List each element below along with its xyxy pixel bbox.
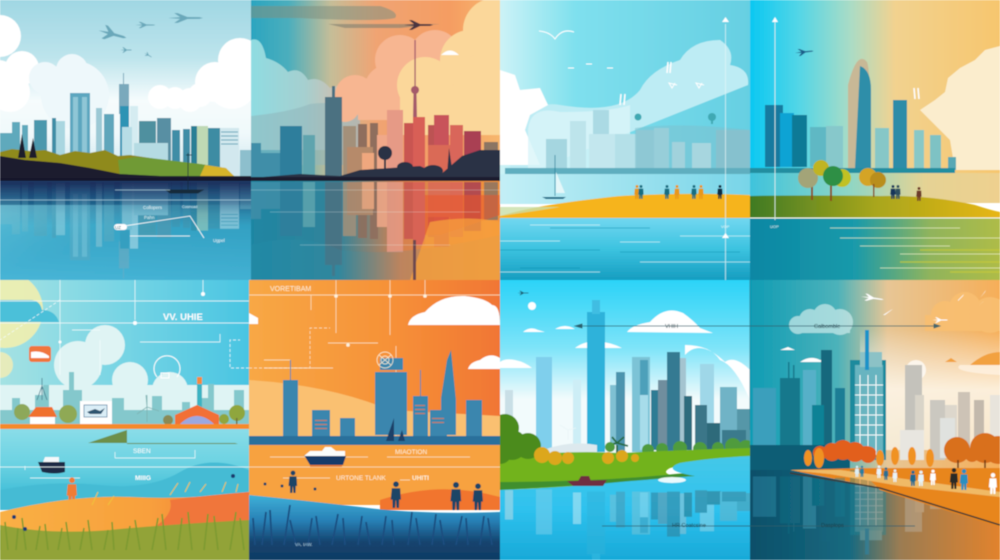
labels: Dasplops	[821, 523, 844, 529]
sand	[0, 492, 249, 560]
orange trees	[804, 433, 1000, 475]
labels: HR Coatcsine	[672, 523, 706, 529]
diagram lines	[124, 216, 204, 238]
boat	[304, 447, 346, 466]
diagram labels	[115, 205, 225, 243]
antenna icon	[377, 352, 393, 368]
reflection	[753, 470, 1000, 554]
shoreline highlight	[750, 217, 1000, 219]
left building and trees	[14, 378, 77, 424]
planes and birds	[860, 290, 986, 323]
sun	[528, 302, 536, 310]
sky	[500, 280, 750, 460]
sail shapes	[386, 418, 405, 441]
hall	[163, 405, 245, 425]
labels: MIIIG	[135, 475, 151, 482]
skyline	[750, 59, 956, 173]
sun glow	[0, 272, 43, 348]
red glow on water	[425, 195, 500, 235]
balloons	[634, 113, 716, 124]
people	[634, 185, 723, 199]
panel: teal to orange skyline	[251, 0, 527, 280]
billboard	[80, 401, 112, 424]
dark shoreline	[251, 177, 500, 182]
birds and arrows	[539, 31, 704, 88]
diagram labels: UZ	[115, 225, 121, 230]
node dots	[58, 292, 205, 344]
clouds	[0, 14, 252, 112]
skyline	[0, 73, 251, 180]
gradient sky	[251, 0, 500, 182]
reflection	[0, 182, 251, 278]
labels: UHITI	[412, 475, 429, 482]
horizontal arrow line	[575, 324, 750, 526]
walkway again	[790, 470, 1000, 497]
diagram labels: Cosmoad	[182, 205, 197, 209]
dark water band	[0, 182, 251, 214]
labels: Calbomble	[814, 324, 840, 330]
horizon haze	[860, 330, 1000, 450]
label pill	[114, 224, 127, 230]
panel: cyan to amber park skyline	[750, 0, 1000, 280]
orange band	[249, 445, 500, 505]
dark reeds	[253, 505, 492, 545]
dark low city	[750, 445, 850, 472]
trees	[798, 160, 886, 201]
diagram labels: Ugpel	[213, 238, 225, 243]
tower	[197, 377, 202, 418]
curved light band	[249, 380, 500, 445]
water glow	[0, 204, 240, 260]
cream cloud	[920, 46, 1000, 170]
plane	[517, 291, 529, 295]
walkers	[855, 465, 997, 494]
orange lawn	[790, 468, 1000, 530]
reflection	[251, 182, 498, 276]
shore flowers	[12, 474, 235, 531]
planes	[97, 13, 203, 59]
skyline	[753, 330, 1000, 460]
water	[251, 181, 500, 280]
orange sky	[249, 280, 500, 450]
skyline	[0, 372, 250, 425]
skyline	[505, 300, 750, 457]
panel: pale cyan beach skyline	[500, 0, 750, 280]
sky	[0, 280, 249, 425]
plane	[794, 47, 814, 56]
green park	[500, 448, 750, 490]
diagram lines	[0, 280, 249, 375]
river shore highlight	[658, 477, 686, 483]
park trees	[488, 414, 639, 465]
ripples	[500, 225, 750, 272]
clouds	[249, 296, 500, 369]
orange quay	[0, 424, 249, 429]
water	[750, 218, 1000, 280]
sky	[500, 0, 750, 180]
labels	[336, 449, 429, 482]
water	[0, 429, 249, 499]
labels	[665, 324, 706, 529]
sun glow	[906, 360, 926, 380]
sky	[0, 0, 251, 180]
panel: blue diagram harbor	[0, 272, 250, 560]
boat	[567, 476, 607, 486]
panel: teal to orange riverside	[750, 280, 1000, 560]
boat	[38, 457, 65, 474]
water	[500, 218, 750, 280]
clouds	[500, 40, 748, 180]
vertical axis arrow	[772, 17, 778, 220]
palm	[608, 437, 628, 465]
tower reflection	[413, 240, 416, 280]
water	[750, 470, 1000, 560]
gradient sky	[750, 0, 1000, 180]
people silhouettes	[289, 471, 483, 510]
lower water wash	[355, 249, 421, 280]
top streak clouds	[251, 6, 396, 20]
panel divider	[750, 280, 751, 430]
water	[0, 181, 251, 280]
tv tower	[410, 40, 420, 118]
vertical axis arrow	[722, 17, 729, 280]
shoreline vegetation	[0, 134, 251, 182]
axis label: UOP	[770, 224, 779, 229]
water	[500, 456, 750, 560]
pause mark	[914, 88, 919, 99]
grass	[0, 520, 249, 560]
bottom label: VA. IAW.	[295, 542, 313, 547]
clouds	[500, 310, 750, 400]
labels: URTONE TLANK	[336, 475, 387, 482]
band lines	[249, 457, 500, 480]
ripples	[251, 190, 500, 245]
clouds	[251, 0, 527, 165]
reeds	[88, 430, 238, 444]
embankment cover	[860, 470, 1000, 527]
tree line	[605, 438, 754, 456]
sunset hill	[380, 489, 500, 510]
labels	[814, 324, 844, 529]
clouds	[780, 292, 1000, 375]
sky	[750, 280, 1000, 470]
wave band	[0, 462, 249, 510]
people	[890, 185, 922, 201]
skyline	[249, 350, 500, 445]
walkway	[790, 470, 1000, 497]
callout bubble	[29, 346, 51, 362]
boat	[166, 153, 203, 193]
heading: VORETIBAM	[270, 286, 311, 293]
labels: SBEN	[133, 448, 151, 455]
labels: 8. SULU	[115, 513, 138, 519]
labels: VHIH	[665, 324, 678, 330]
beach	[500, 194, 750, 220]
dark reed strip	[500, 472, 695, 490]
wind turbine	[137, 395, 159, 422]
panel: orange diagram harbor	[249, 280, 500, 560]
building lights	[315, 405, 444, 429]
diagram labels: Pahn	[144, 215, 155, 220]
labels: MIAOTION	[395, 449, 427, 456]
yellow grass tufts	[92, 482, 238, 505]
heading: VV. UHIE	[163, 312, 203, 323]
blue ground	[249, 495, 500, 560]
lake	[750, 173, 1000, 203]
ripples	[830, 228, 1000, 268]
skyline	[251, 86, 498, 180]
sailboat	[542, 155, 566, 199]
person	[67, 477, 77, 504]
node dots	[334, 294, 427, 347]
panel: blue lake skyline with planes	[0, 0, 262, 280]
labels	[115, 448, 151, 519]
gauge icon	[154, 356, 180, 378]
embankment shadow	[790, 473, 1000, 525]
reed tips	[264, 482, 316, 490]
skyline	[505, 110, 750, 177]
dome building	[543, 425, 597, 458]
diagram lines	[249, 280, 500, 445]
tree silhouettes	[251, 146, 500, 180]
horizontal diagram lines	[0, 450, 249, 478]
diagram labels: Collopers	[143, 205, 163, 210]
plane	[404, 20, 433, 30]
horizontal arrow lines	[750, 324, 940, 526]
reflection	[505, 489, 750, 560]
ripple	[0, 190, 251, 200]
panel: green park skyline	[488, 280, 754, 560]
meadow	[750, 196, 1000, 218]
clouds	[0, 300, 249, 415]
pause marks	[620, 62, 671, 105]
lake	[500, 174, 750, 204]
axis label: VOP	[721, 224, 730, 229]
